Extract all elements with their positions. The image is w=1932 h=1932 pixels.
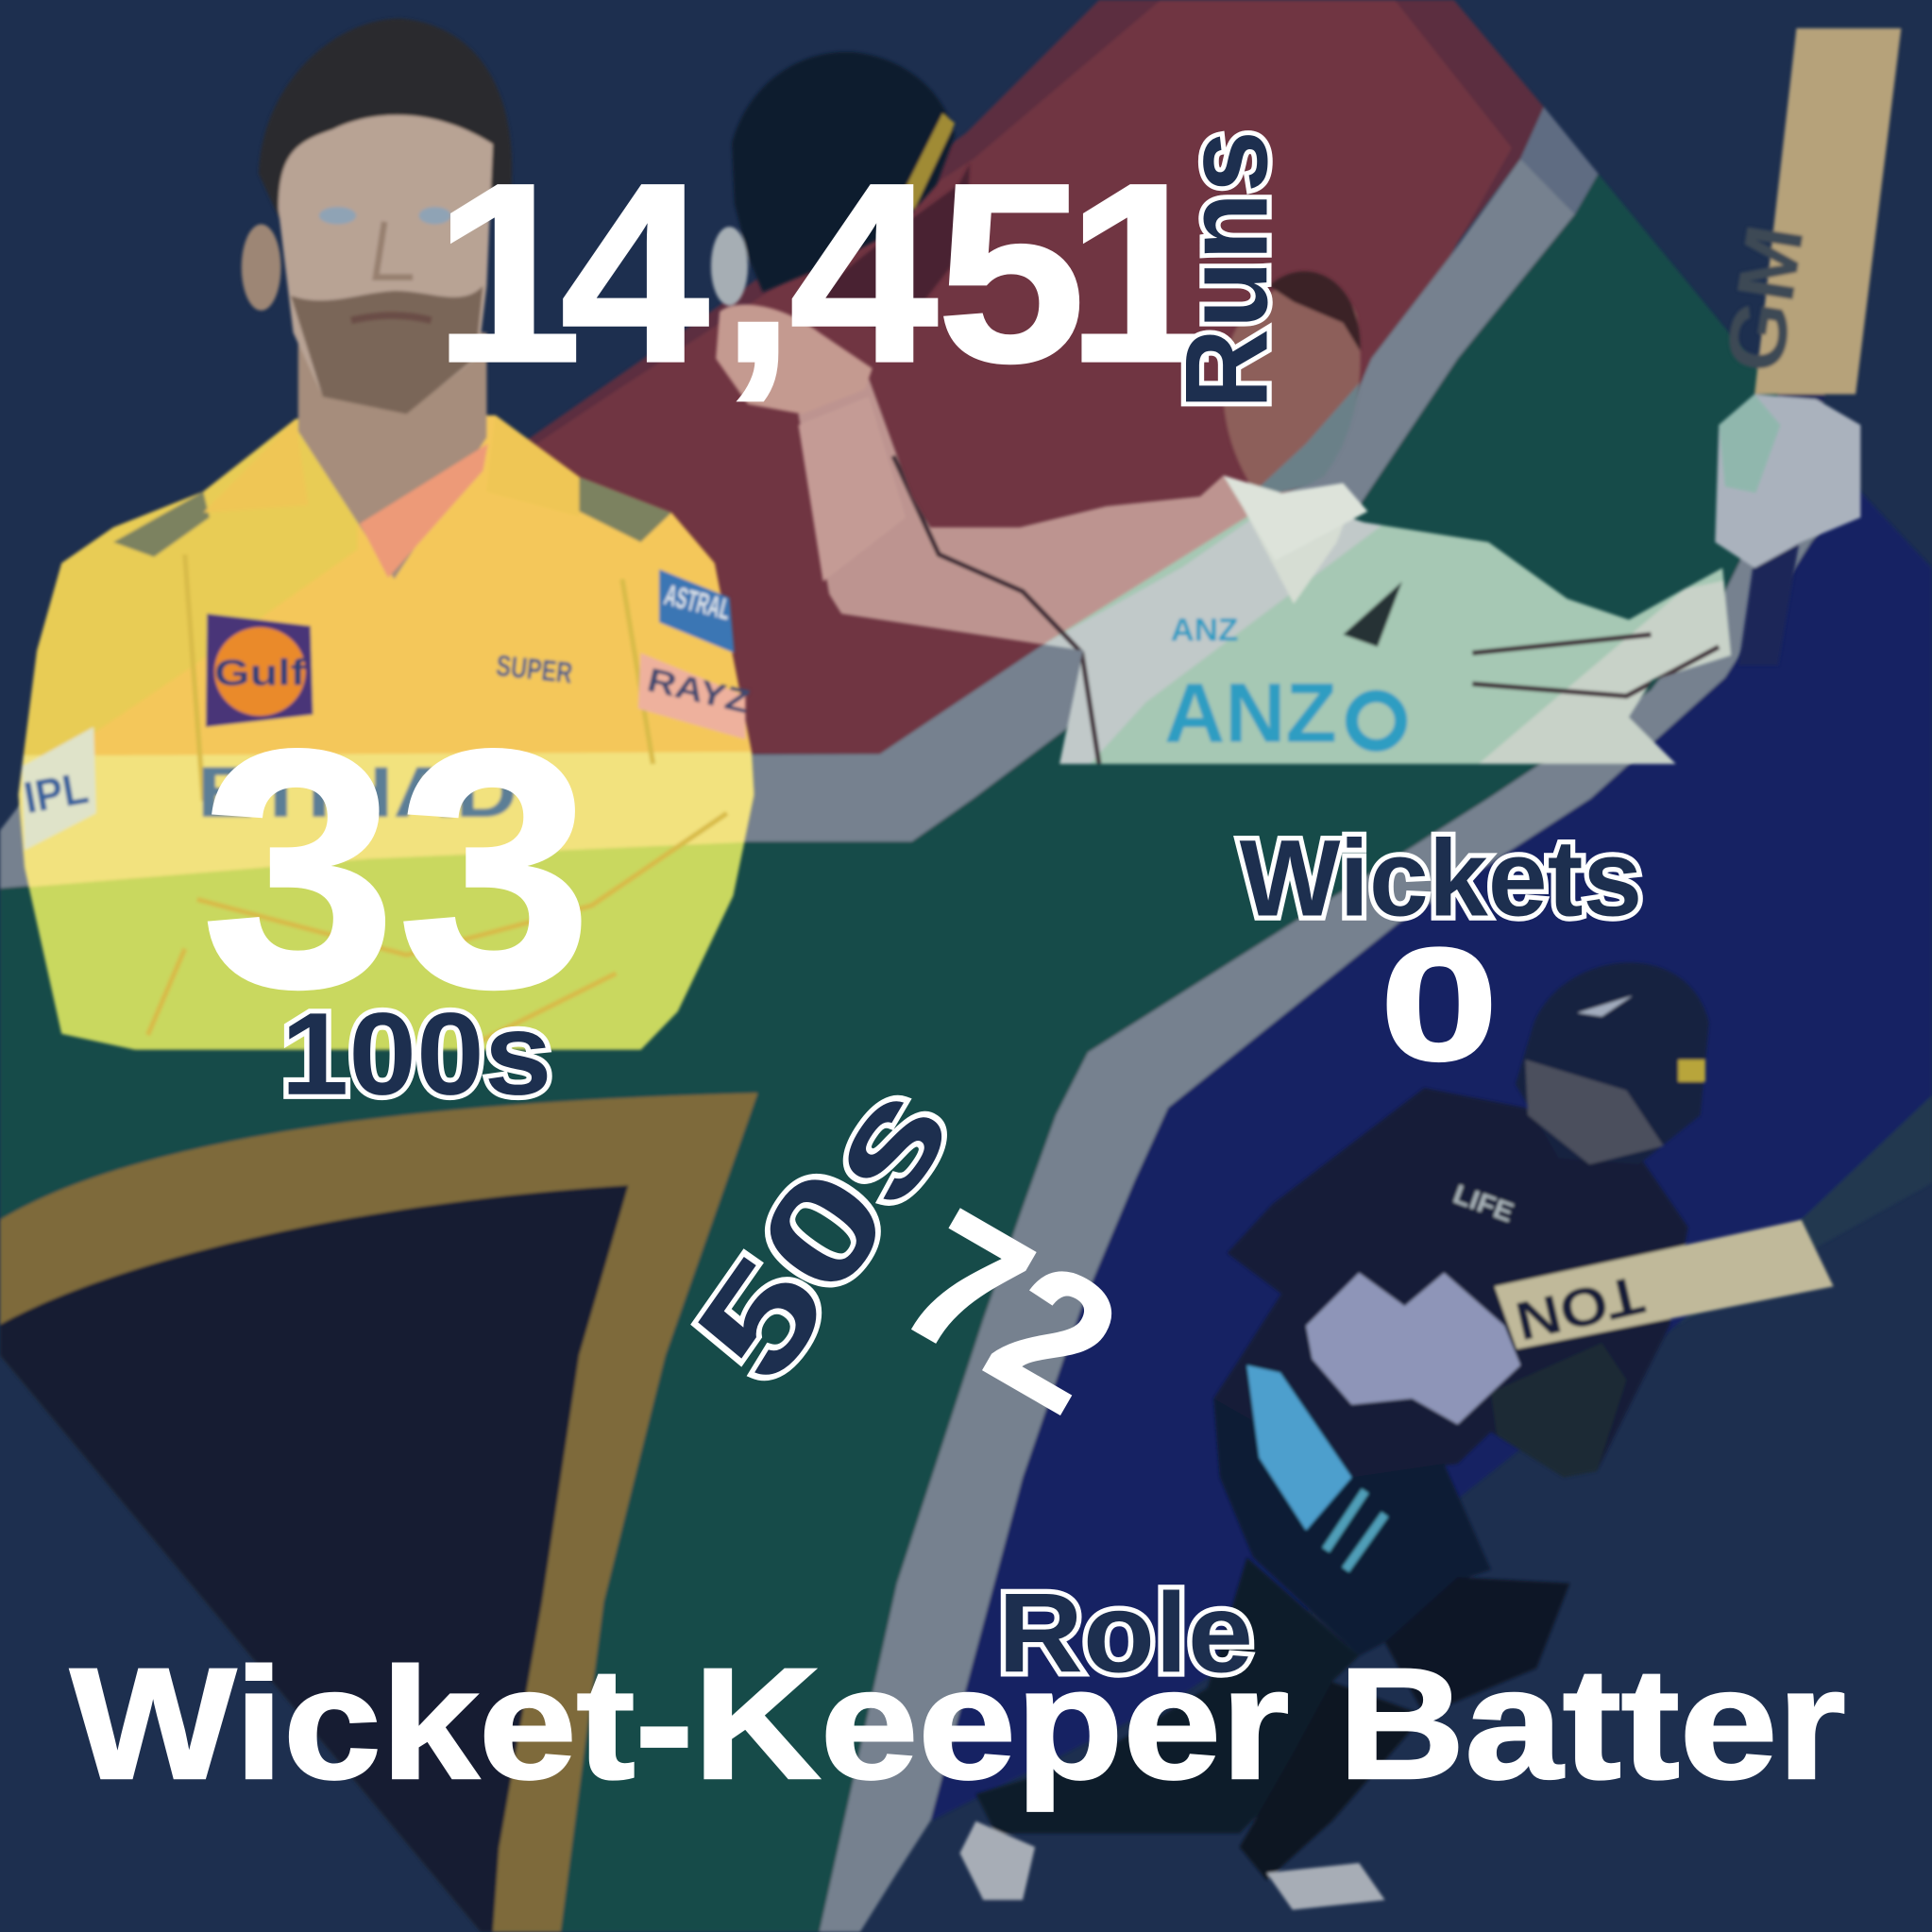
flag: gold chevron xyxy=(0,1093,757,1932)
role label: Role xyxy=(998,1570,1253,1697)
collar xyxy=(1224,476,1367,561)
flag: dark outer corner xyxy=(1676,1095,1932,1326)
logo: droplet mark xyxy=(1351,696,1401,745)
stat: hundreds value: 33 xyxy=(201,680,593,1059)
helmet xyxy=(1516,962,1709,1164)
logo: sponsor patch: Gulf xyxy=(214,652,307,693)
hair xyxy=(259,19,512,222)
bat handle xyxy=(1738,395,1824,666)
flag: blue field xyxy=(930,486,1932,1822)
hair xyxy=(1269,271,1361,351)
mouth xyxy=(351,315,432,320)
bat xyxy=(1495,1220,1834,1349)
arm fold lines xyxy=(148,554,727,1047)
forearm xyxy=(1491,1343,1626,1478)
logo: sleeve sponsor xyxy=(659,569,735,653)
flag: upper white band xyxy=(0,108,1598,889)
helmet fern badge xyxy=(1577,995,1633,1016)
stat: fifties value: 72 xyxy=(871,1172,1149,1451)
beard xyxy=(291,286,483,414)
eyes xyxy=(319,207,356,224)
thigh xyxy=(1213,1398,1491,1656)
stat: runs value: 14,451 xyxy=(433,130,1215,415)
jersey sponsor: LIFE xyxy=(1449,1179,1517,1229)
lower pad xyxy=(1240,1682,1424,1880)
glove xyxy=(716,304,873,414)
bat blade xyxy=(1754,28,1901,395)
player: celebrating with helmet and bat xyxy=(711,28,1901,799)
logo: sleeve sponsor two xyxy=(638,653,754,739)
torso xyxy=(1213,1088,1688,1478)
right glove xyxy=(1715,395,1860,568)
stat: wickets label: Wickets xyxy=(1240,819,1642,940)
stat: runs label: Runs xyxy=(1161,130,1292,409)
logo: fern xyxy=(1343,582,1402,647)
rear leg and pad xyxy=(975,1557,1359,1834)
logo: sleeve sponsor two: RAYZ xyxy=(644,662,754,720)
bat label: GM xyxy=(1708,218,1822,379)
stat: hundreds label: 100s xyxy=(281,990,552,1120)
stat: fifties label: 50s xyxy=(664,1052,982,1410)
logo: sleeve sponsor: ASTRAL xyxy=(661,578,734,626)
forearm guard xyxy=(799,397,906,582)
shoes xyxy=(959,1822,1035,1900)
jersey tint over flag zones xyxy=(25,436,357,754)
shoulder patches xyxy=(113,477,671,557)
gloves xyxy=(1306,1273,1520,1424)
flag: black triangle xyxy=(0,1185,628,1932)
flag: red field xyxy=(37,0,1544,783)
logo: sponsor patch xyxy=(206,614,313,727)
nose xyxy=(376,222,413,278)
logo: small sponsor: ANZ xyxy=(1171,613,1238,649)
neck xyxy=(298,332,486,579)
ear xyxy=(242,224,281,311)
leg stripes xyxy=(1326,1491,1385,1569)
logo: league badge: IPL xyxy=(20,762,92,822)
shorts stripe xyxy=(1247,1365,1351,1531)
bat label: TON xyxy=(1510,1263,1650,1351)
role value: Wicket-Keeper Batter xyxy=(70,1636,1846,1812)
player: batter in dark kit xyxy=(959,962,1834,1910)
flag: lower white band xyxy=(820,486,1856,1932)
logo: chest sponsor: ETIHAD xyxy=(197,753,517,833)
collar xyxy=(203,415,579,517)
helmet xyxy=(732,52,970,338)
logo: team crest: SUPER xyxy=(495,649,574,689)
shirt xyxy=(797,378,1733,767)
upper pad xyxy=(1385,1577,1569,1715)
player: portrait in yellow jersey xyxy=(0,19,788,1059)
jersey xyxy=(0,395,788,1059)
stat: wickets value: 0 xyxy=(1380,914,1499,1093)
logo: league badge xyxy=(20,727,96,850)
sleeve piping xyxy=(893,456,1719,764)
helmet clip xyxy=(1678,1059,1705,1082)
face xyxy=(279,115,493,413)
left glove fingers xyxy=(711,227,748,306)
logo: chest sponsor: ANZ xyxy=(1164,667,1337,760)
head xyxy=(1223,281,1361,492)
